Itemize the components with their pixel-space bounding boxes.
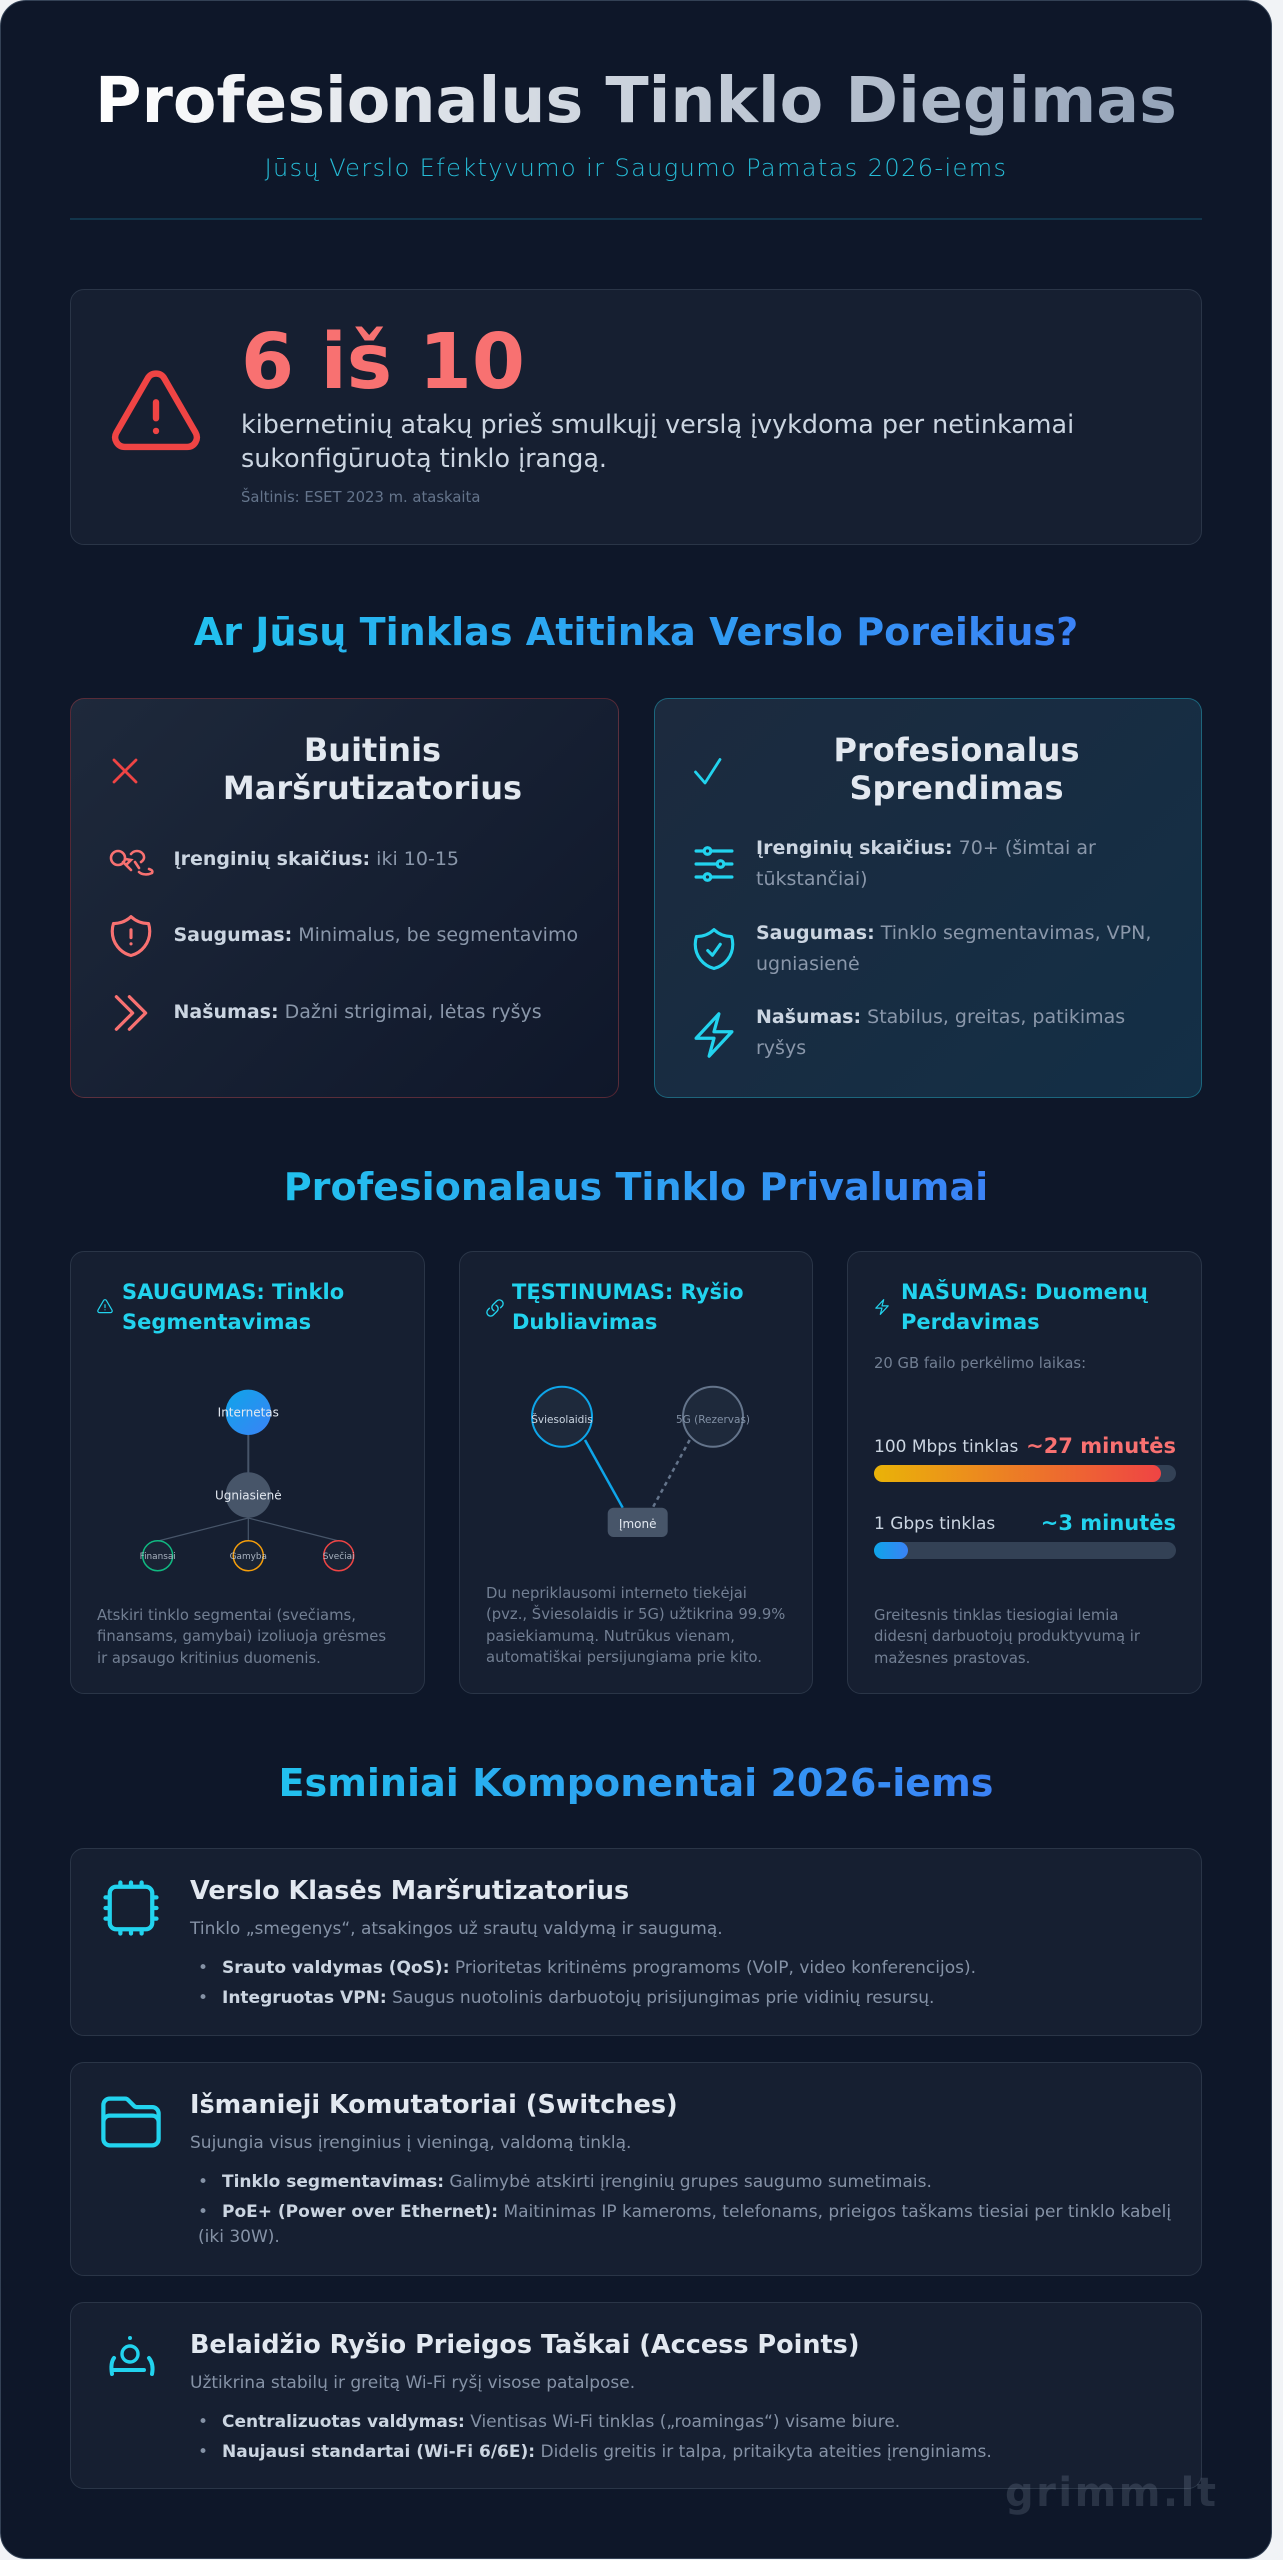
bullet list [198, 1958, 976, 2008]
bullet list: Centralizuotas valdymas: Vientisas Wi-Fi tinklas („roamingas“) visame biure. [222, 2412, 900, 2432]
bar: 100 Mbps: ~27 minutės [1026, 1434, 1176, 1458]
description: automatiškai persijungiama prie kito. [486, 1649, 762, 1666]
card background [70, 2302, 1202, 2489]
security: ugniasienė [756, 953, 860, 975]
security: Saugumas: Tinklo segmentavimas, VPN, [756, 922, 1151, 944]
heading: requirements: Profesionalaus Tinklo Privalumai [284, 1165, 988, 1209]
card title: Maršrutizatorius [223, 769, 522, 807]
bullet list: • [198, 2442, 208, 2462]
panel: hero statistic [70, 289, 1202, 545]
panel: security feature [70, 1251, 425, 1694]
icon: folder [101, 2096, 161, 2148]
feature title [512, 1280, 744, 1334]
icon: shield check [694, 928, 734, 970]
bar: 1 Gbps: 1 Gbps tinklas [874, 1514, 995, 1534]
icon: check [694, 758, 722, 784]
feature title [901, 1279, 1148, 1334]
feature title: Perdavimas [901, 1310, 1040, 1334]
bar: 1 Gbps: ~3 minutės [1041, 1511, 1176, 1535]
feature title: TĘSTINUMAS: Ryšio [512, 1280, 744, 1304]
icon: warning triangle [112, 370, 200, 450]
header [95, 63, 1177, 182]
redundancy diagram [531, 1386, 750, 1537]
component title: Belaidžio Ryšio Prieigos Taškai (Access Points) [190, 2330, 860, 2360]
icon: chip [103, 1880, 159, 1936]
feature title: SAUGUMAS: Tinklo [122, 1280, 344, 1304]
panel: continuity feature [459, 1251, 813, 1694]
card background [70, 2062, 1202, 2276]
statistic text: sukonfigūruotą tinklo įrangą. [241, 443, 607, 473]
description: mažesnes prastovas. [874, 1650, 1030, 1667]
bullet list: Srauto valdymas (QoS): Prioritetas kritinėms programoms (VoIP, video konferencijos). [222, 1958, 976, 1978]
icon: small bolt [875, 1299, 889, 1315]
icon: bolt [694, 1012, 734, 1058]
source: Šaltinis: ESET 2023 m. ataskaita [241, 489, 480, 506]
component description: Tinklo „smegenys“, atsakingos už srautų valdymą ir saugumą. [190, 1919, 723, 1939]
card title: Sprendimas [849, 769, 1064, 807]
statistic text [241, 409, 1074, 473]
bullet list: • [198, 2202, 208, 2222]
feature title: NAŠUMAS: Duomenų [901, 1280, 1148, 1304]
card title: Buitinis [304, 731, 441, 769]
performance: ryšys [756, 1037, 806, 1059]
card title: Profesionalus [833, 731, 1080, 769]
performance: Našumas: Dažni strigimai, lėtas ryšys [174, 1001, 542, 1023]
watermark: grimm.lt [1005, 2470, 1218, 2516]
bullet list: • [198, 1988, 208, 2008]
card background [70, 1848, 1202, 2036]
bullet list: Naujausi standartai (Wi-Fi 6/6E): Didelis greitis ir talpa, pritaikyta ateities įrenginiams. [222, 2442, 992, 2462]
description: Atskiri tinklo segmentai (svečiams, [97, 1607, 356, 1624]
network segmentation diagram: Gamyba [230, 1552, 267, 1562]
bullet list: • [198, 2172, 208, 2192]
description: ir apsaugo kritinius duomenis. [97, 1650, 321, 1667]
component title: Verslo Klasės Maršrutizatorius [190, 1876, 629, 1906]
component description: Sujungia visus įrenginius į vieningą, valdomą tinklą. [190, 2133, 631, 2153]
icon: link [486, 1299, 504, 1317]
bullet list: PoE+ (Power over Ethernet): Maitinimas IP kameroms, telefonams, prieigos taškams tiesiai per tinklo kabelį [222, 2202, 1171, 2222]
heading: comparison: Ar Jūsų Tinklas Atitinka Verslo Poreikius? [194, 610, 1078, 654]
icon: small triangle [97, 1299, 113, 1314]
bar: 100 Mbps: 100 Mbps tinklas [874, 1437, 1018, 1457]
subtitle: Jūsų Verslo Efektyvumo ir Saugumo Pamatas 2026-iems [265, 154, 1007, 182]
network segmentation diagram: Ugniasienė [215, 1488, 282, 1502]
bullet list [198, 2172, 1171, 2247]
bullet list: (iki 30W). [198, 2227, 280, 2247]
icon: wireless access point [108, 2334, 158, 2380]
security: Saugumas: Minimalus, be segmentavimo [174, 924, 578, 946]
feature title [122, 1280, 344, 1334]
panel: performance feature [847, 1251, 1202, 1694]
description: pasiekiamumą. Nutrūkus vienam, [486, 1628, 735, 1645]
panel: professional solution [654, 698, 1202, 1098]
component description: Užtikrina stabilų ir greitą Wi-Fi ryšį visose patalpose. [190, 2373, 635, 2393]
network segmentation diagram [140, 1390, 355, 1572]
feature title: Dubliavimas [512, 1310, 657, 1334]
description: finansams, gamybai) izoliuoja grėsmes [97, 1628, 386, 1645]
redundancy diagram: Įmonė [619, 1517, 656, 1531]
description [874, 1607, 1140, 1667]
panel: home router [70, 698, 619, 1098]
component title: Išmanieji Komutatoriai (Switches) [190, 2090, 678, 2120]
statistic text: kibernetinių atakų prieš smulkųjį verslą įvykdoma per netinkamai [241, 409, 1074, 439]
device count [756, 837, 1096, 890]
icon: sliders [694, 846, 734, 882]
icon: shield alert [110, 915, 152, 958]
device count: Įrenginių skaičius: 70+ (šimtai ar [756, 837, 1096, 859]
security [756, 922, 1151, 975]
network segmentation diagram: Internetas [218, 1406, 279, 1420]
device count: Įrenginių skaičius: iki 10-15 [174, 848, 459, 870]
redundancy diagram: Šviesolaidis [531, 1413, 593, 1426]
transfer caption: 20 GB failo perkėlimo laikas: [874, 1355, 1086, 1372]
description: (pvz., Šviesolaidis ir 5G) užtikrina 99.9% [486, 1606, 785, 1623]
device count: tūkstančiai) [756, 868, 868, 890]
bar: 1 Gbps [874, 1511, 1176, 1559]
bullet list: Tinklo segmentavimas: Galimybė atskirti įrenginių grupes saugumo sumetimais. [222, 2172, 932, 2192]
performance [756, 1006, 1125, 1059]
description: Du nepriklausomi interneto tiekėjai [486, 1585, 747, 1602]
bullet list: • [198, 2412, 208, 2432]
bullet list [198, 2407, 992, 2467]
card title [833, 731, 1080, 807]
bullet list: Integruotas VPN: Saugus nuotolinis darbuotojų prisijungimas prie vidinių resursų. [222, 1988, 934, 2008]
heading: components: Esminiai Komponentai 2026-iems [279, 1761, 993, 1805]
title: Profesionalus Tinklo Diegimas [95, 63, 1177, 137]
performance: Našumas: Stabilus, greitas, patikimas [756, 1006, 1125, 1028]
icon: double chevron [114, 995, 148, 1031]
bullet list: • [198, 1958, 208, 1978]
feature title: Segmentavimas [122, 1310, 311, 1334]
description [97, 1607, 386, 1667]
icon: cross [112, 758, 138, 784]
network segmentation diagram: Finansai [140, 1552, 176, 1562]
redundancy diagram: 5G (Rezervas) [676, 1414, 750, 1426]
description: didesnį darbuotojų produktyvumą ir [874, 1628, 1140, 1645]
big number: 6 iš 10 [241, 317, 525, 406]
bar: 100 Mbps [874, 1434, 1176, 1482]
description [486, 1585, 785, 1666]
description: Greitesnis tinklas tiesiogiai lemia [874, 1607, 1118, 1624]
network segmentation diagram: Svečiai [323, 1551, 355, 1562]
icon: broken link [110, 850, 154, 876]
card title [223, 731, 522, 807]
